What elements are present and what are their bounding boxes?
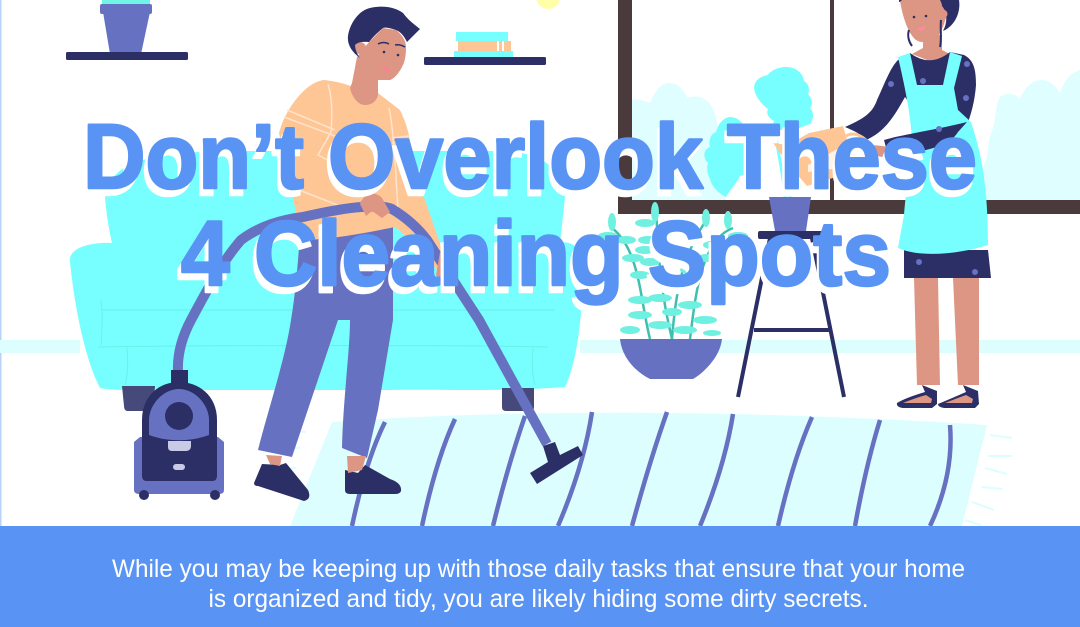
stool with potted monstera <box>704 67 844 397</box>
intro banner <box>0 526 1080 627</box>
title line 2: 4 Cleaning Spots <box>181 203 891 305</box>
intro text: is organized and tidy, you are likely hiding some dirty secrets. <box>208 585 868 613</box>
title <box>79 106 977 312</box>
title line 1: Don’t Overlook These <box>79 113 975 215</box>
floor plant in bowl <box>598 202 748 379</box>
wall shelf with books <box>424 32 546 65</box>
intro text: While you may be keeping up with those daily tasks that ensure that your home <box>112 555 965 583</box>
wall shelf with plant pot <box>66 0 188 60</box>
vacuum cleaner with hose <box>134 194 583 500</box>
sun <box>536 0 560 9</box>
title line 1: Don’t Overlook These <box>83 106 977 208</box>
sofa <box>70 151 583 411</box>
man vacuuming <box>254 7 450 501</box>
woman with apron <box>845 0 991 408</box>
title line 2: 4 Cleaning Spots <box>177 210 889 312</box>
window with bushes <box>618 0 1080 214</box>
towel held by woman <box>773 126 888 186</box>
intro text <box>112 555 965 613</box>
rug <box>274 412 1012 526</box>
